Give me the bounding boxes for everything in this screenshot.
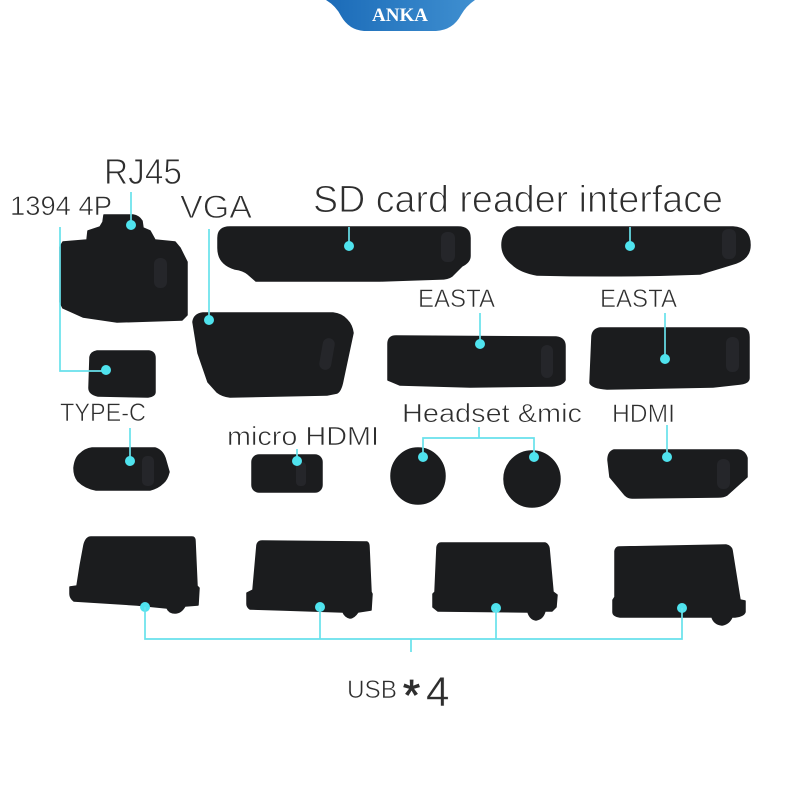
- label: SD card reader interface: SD card reader interface: [313, 179, 723, 221]
- label: EASTA right: EASTA: [600, 285, 677, 313]
- label: Headset & mic: Headset &mic: [402, 398, 582, 428]
- plug: EASTA right: [590, 313, 749, 389]
- brand tab: ANKA: [326, 0, 475, 31]
- plug: RJ45: [60, 192, 187, 322]
- plug: 1394 4P: [60, 227, 155, 397]
- USB connector bracket: [145, 607, 682, 652]
- plug: USB 4: [613, 545, 745, 625]
- plug: USB 2: [247, 541, 372, 618]
- label: micro HDMI: micro HDMI: [227, 421, 379, 451]
- label: RJ45: RJ45: [104, 151, 182, 192]
- plug: HDMI: [608, 425, 747, 498]
- label: VGA: VGA: [180, 189, 253, 225]
- plug: Headset and mic: [391, 427, 560, 507]
- label: USB *4: 4: [426, 668, 449, 715]
- label: HDMI: HDMI: [612, 400, 675, 428]
- plug: VGA: [193, 229, 353, 397]
- plug: micro HDMI: [252, 449, 322, 492]
- label: USB *4: *: [403, 671, 420, 720]
- label: USB *4: [347, 668, 449, 720]
- plug: SD card reader right: [502, 227, 750, 276]
- plug: USB 3: [433, 543, 557, 620]
- plug: EASTA left: [388, 313, 565, 387]
- label: USB *4: USB: [347, 676, 397, 704]
- plug: TYPE-C: [74, 428, 169, 490]
- label: EASTA left: EASTA: [418, 285, 495, 313]
- label: TYPE-C: TYPE-C: [60, 399, 146, 427]
- plug: USB 1: [70, 537, 199, 613]
- brand tab: ANKA: ANKA: [372, 5, 428, 26]
- plug: SD card reader left: [218, 227, 470, 281]
- label: 1394 4P: 1394 4P: [10, 191, 112, 221]
